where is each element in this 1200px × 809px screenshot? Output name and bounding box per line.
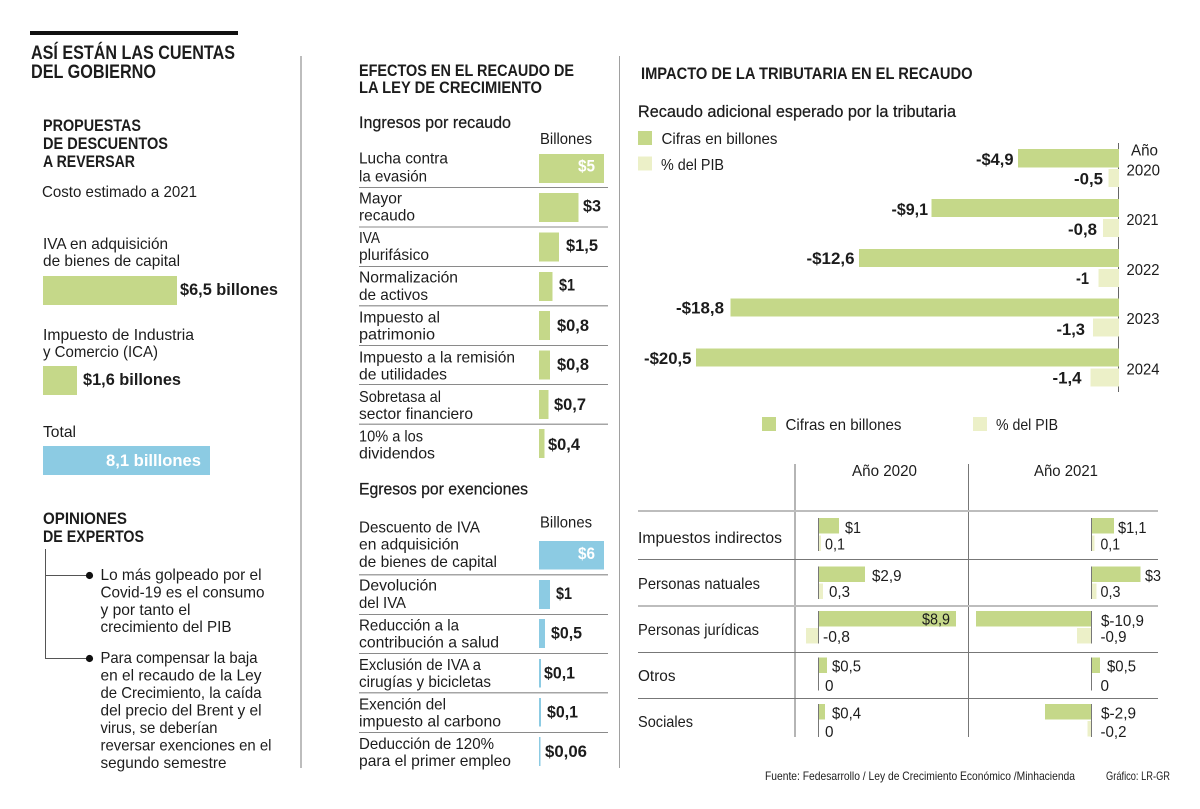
heading: propuestas de descuentos [43, 117, 168, 171]
row: descuento de IVA: en adquisición [359, 536, 459, 554]
bar: total: Total [43, 424, 76, 441]
heading: opiniones de expertos: DE EXPERTOS [43, 528, 144, 546]
row: mayor recaudo: $3 [583, 196, 601, 216]
year 2024 [644, 348, 1160, 388]
row: impuestos indirectos: $1,1 [1118, 520, 1147, 537]
year 2021: 2021 [1126, 212, 1159, 229]
row: personas naturales: $2,9 [872, 568, 902, 585]
row: exclusión de IVA: $0,1 [544, 664, 575, 682]
column headers: Año 2021 [1034, 463, 1098, 480]
row: normalización de activos: de activos [359, 287, 428, 304]
row: IVA plurifásico [359, 230, 598, 264]
bar: IVA en adquisición: de bienes de capital [43, 253, 180, 270]
row: IVA plurifásico: IVA [359, 230, 380, 247]
subheading: recaudo adicional: Recaudo adicional esperado por la tributaria [638, 103, 957, 121]
row: personas jurídicas: $-10,9 [1101, 613, 1144, 630]
year 2023 [676, 298, 1160, 339]
text: opinión 2: virus, se deberían [100, 720, 218, 737]
bar: impuesto de industria y comercio: Impuesto de Industria [43, 327, 194, 344]
row: descuento de IVA: $6 [578, 544, 595, 563]
row: primer empleo: $0,06 [545, 742, 587, 761]
row: impuesto a la remisión: de utilidades [359, 366, 447, 384]
text: opinión 2: Para compensar la baja [100, 650, 258, 667]
row: personas naturales: Personas natuales [638, 576, 760, 593]
row: contribución a salud: $0,5 [551, 624, 582, 642]
text: opinión 2: reversar exenciones en el [100, 738, 272, 754]
row: impuesto al patrimonio: $0,8 [557, 316, 589, 335]
row: impuesto a la remisión [359, 350, 589, 384]
heading: efectos en el recaudo [359, 62, 574, 97]
row: personas jurídicas: Personas jurídicas [638, 622, 759, 639]
row: impuesto al carbono: Exención del [359, 696, 446, 714]
title: así están las cuentas: ASÍ ESTÁN LAS CUENTAS [31, 42, 235, 64]
year 2021: -0,8 [1068, 220, 1097, 239]
legend: bottom: Cifras en billones [786, 417, 902, 434]
year 2020: -0,5 [1074, 170, 1103, 188]
text: opinión 1: crecimiento del PIB [100, 619, 232, 636]
panel: efectos en el recaudo [359, 62, 608, 770]
panel: cuentas del gobierno [30, 31, 278, 772]
row: dividendos: 10% a los [359, 428, 423, 446]
legend: top [638, 131, 778, 174]
text: opinión 2 [100, 650, 272, 772]
year 2022: -1 [1076, 269, 1089, 288]
row: contribución a salud: Reducción a la [359, 618, 459, 634]
year 2022: -$12,6 [806, 249, 854, 268]
heading: opiniones de expertos: OPINIONES [43, 510, 127, 528]
bar: total: 8,1 billlones [106, 451, 201, 470]
row: contribución a salud: contribución a salud [359, 634, 499, 652]
heading: egresos por exenciones: Egresos por exenciones [359, 480, 528, 498]
row: descuento de IVA [359, 520, 604, 571]
row: impuesto a la remisión: $0,8 [557, 355, 589, 374]
year 2020: Año [1131, 142, 1158, 160]
year 2024: 2024 [1126, 362, 1160, 378]
heading: efectos en el recaudo: LA LEY DE CRECIMIENTO [359, 79, 542, 97]
row: personas naturales [638, 566, 1161, 601]
icon: bracket with bullets [46, 549, 93, 662]
row: normalización de activos: Normalización [359, 270, 458, 286]
row: sociales: 0 [825, 724, 834, 741]
credit: Gráfico: LR-GR [1106, 769, 1170, 783]
row: personas jurídicas: -0,9 [1100, 629, 1127, 646]
row: sobretasa: sector financiero [359, 406, 473, 423]
row: otros [638, 658, 1136, 695]
text: costo estimado: Costo estimado a 2021 [42, 184, 197, 201]
row: dividendos [359, 428, 581, 462]
legend: bottom: % del PIB [996, 417, 1058, 434]
year 2021: -$9,1 [892, 200, 928, 219]
text: opinión 1 [100, 567, 265, 636]
row: impuesto al patrimonio: patrimonio [359, 326, 435, 344]
row: sobretasa: $0,7 [554, 395, 586, 414]
row: personas naturales: 0,3 [829, 584, 850, 601]
row: impuesto al patrimonio [359, 310, 589, 344]
year 2024: -1,4 [1052, 368, 1082, 388]
year 2023: 2023 [1126, 311, 1160, 328]
row: descuento de IVA: Descuento de IVA [359, 520, 480, 536]
row: contribución a salud [359, 618, 582, 652]
row: impuestos indirectos: 0,1 [825, 536, 845, 554]
year 2020: -$4,9 [976, 150, 1014, 169]
row: IVA plurifásico: $1,5 [566, 236, 598, 255]
heading: impacto de la tributaria: IMPACTO DE LA TRIBUTARIA EN EL RECAUDO [641, 65, 973, 83]
row: otros: $0,5 [832, 658, 861, 676]
source: Fuente: Fedesarrollo / Ley de Crecimiento Económico /Minhacienda [765, 769, 1075, 783]
heading: efectos en el recaudo: EFECTOS EN EL RECAUDO DE [359, 62, 574, 80]
row: personas naturales: 0,3 [1100, 584, 1121, 601]
row: sociales: $0,4 [832, 706, 861, 722]
row: impuesto al carbono [359, 696, 578, 730]
row: lucha contra la evasión: la evasión [359, 168, 427, 186]
row: personas jurídicas [638, 611, 1144, 646]
row: lucha contra la evasión: $5 [578, 156, 595, 176]
text: opinión 2: de Crecimiento, la caída [100, 685, 262, 702]
row: lucha contra la evasión: Lucha contra [359, 150, 448, 168]
text: opinión 1: Covid-19 es el consumo [100, 584, 265, 602]
text: opinión 1: Lo más golpeado por el [100, 567, 262, 584]
row: personas naturales: $3 [1145, 568, 1161, 585]
bar chart: egresos [359, 520, 608, 770]
column headers [852, 463, 1098, 480]
row: impuestos indirectos: 0,1 [1100, 536, 1120, 554]
row: primer empleo: para el primer empleo [359, 753, 511, 770]
year 2022 [806, 249, 1160, 288]
row: sociales [638, 704, 1136, 741]
year 2023: -1,3 [1056, 320, 1085, 339]
row: sociales: -0,2 [1100, 724, 1127, 741]
row: devolución del IVA: del IVA [359, 595, 406, 612]
row: impuesto al carbono: $0,1 [547, 702, 578, 722]
table chart: impacto por rubro [638, 463, 1161, 741]
text: opinión 2: del precio del Brent y el [100, 702, 262, 720]
column headers: Año 2020 [852, 463, 917, 480]
bar: IVA en adquisición: IVA en adquisición [43, 236, 168, 253]
bar: IVA en adquisición: $6,5 billones [180, 280, 278, 299]
heading: propuestas de descuentos: PROPUESTAS [43, 117, 141, 135]
year 2020: 2020 [1126, 162, 1160, 180]
row: devolución del IVA: $1 [556, 584, 572, 603]
row: descuento de IVA: de bienes de capital [359, 554, 497, 571]
row: impuestos indirectos [638, 518, 1147, 554]
row: exclusión de IVA [359, 657, 575, 691]
title: así están las cuentas: DEL GOBIERNO [31, 62, 156, 83]
panel: impacto de la tributaria [638, 65, 1161, 741]
row: personas jurídicas: -0,8 [823, 629, 850, 646]
year 2023: -$18,8 [676, 298, 724, 318]
row: mayor recaudo [359, 190, 601, 224]
row: IVA plurifásico: plurifásico [359, 247, 429, 264]
row: dividendos: $0,4 [548, 435, 581, 454]
row: normalización de activos: $1 [559, 276, 575, 294]
heading: propuestas de descuentos: DE DESCUENTOS [43, 135, 168, 153]
legend: top: Cifras en billones [662, 131, 778, 148]
row: primer empleo: Deducción de 120% [359, 736, 494, 753]
bar chart: ingresos [359, 150, 608, 462]
text: opinión 1: y por tanto el [100, 602, 190, 619]
year 2024: -$20,5 [644, 349, 692, 368]
row: personas jurídicas: $8,9 [922, 612, 950, 628]
row: otros: 0 [825, 678, 834, 695]
row: sobretasa: Sobretasa al [359, 389, 441, 406]
row: otros: Otros [638, 668, 676, 685]
year 2021 [892, 199, 1159, 239]
bar: impuesto de industria y comercio: y Comercio (ICA) [43, 344, 158, 361]
bar: impuesto de industria y comercio: $1,6 billones [83, 370, 181, 389]
bar: total [43, 424, 210, 475]
bar: impuesto de industria y comercio [43, 327, 194, 395]
row: sociales: Sociales [638, 714, 693, 731]
heading: propuestas de descuentos: A REVERSAR [43, 153, 135, 171]
row: devolución del IVA: Devolución [359, 578, 437, 594]
row: mayor recaudo: Mayor [359, 190, 403, 208]
row: exclusión de IVA: Exclusión de IVA a [359, 657, 481, 674]
row: normalización de activos [359, 270, 575, 304]
row: impuestos indirectos: Impuestos indirectos [638, 530, 782, 547]
row: impuesto al patrimonio: Impuesto al [359, 310, 440, 326]
row: primer empleo [359, 736, 587, 770]
row: impuesto al carbono: impuesto al carbono [359, 714, 501, 730]
row: impuestos indirectos: $1 [845, 520, 861, 537]
label: billones egresos: Billones [540, 514, 592, 532]
row: otros: $0,5 [1107, 658, 1136, 676]
year 2020 [976, 142, 1160, 188]
heading: ingresos por recaudo: Ingresos por recaudo [359, 114, 511, 132]
row: devolución del IVA [359, 578, 572, 612]
row: sociales: $-2,9 [1101, 706, 1136, 722]
row: mayor recaudo: recaudo [359, 208, 415, 224]
legend: top: % del PIB [661, 157, 724, 174]
bar chart: recaudo adicional [644, 142, 1160, 392]
text: opinión 2: en el recaudo de la Ley [100, 668, 262, 684]
bar: IVA en adquisición [43, 236, 278, 305]
row: impuesto a la remisión: Impuesto a la remisión [359, 350, 515, 366]
row: dividendos: dividendos [359, 446, 435, 462]
legend: bottom [762, 417, 1058, 434]
title: así están las cuentas [30, 31, 238, 83]
year 2022: 2022 [1126, 262, 1160, 279]
row: lucha contra la evasión [359, 150, 604, 186]
row: exclusión de IVA: cirugías y bicicletas [359, 674, 491, 691]
heading: opiniones de expertos [43, 510, 144, 546]
text: opinión 2: segundo semestre [100, 755, 227, 772]
row: sobretasa [359, 389, 586, 423]
label: billones: Billones [540, 131, 592, 148]
row: otros: 0 [1100, 678, 1109, 695]
